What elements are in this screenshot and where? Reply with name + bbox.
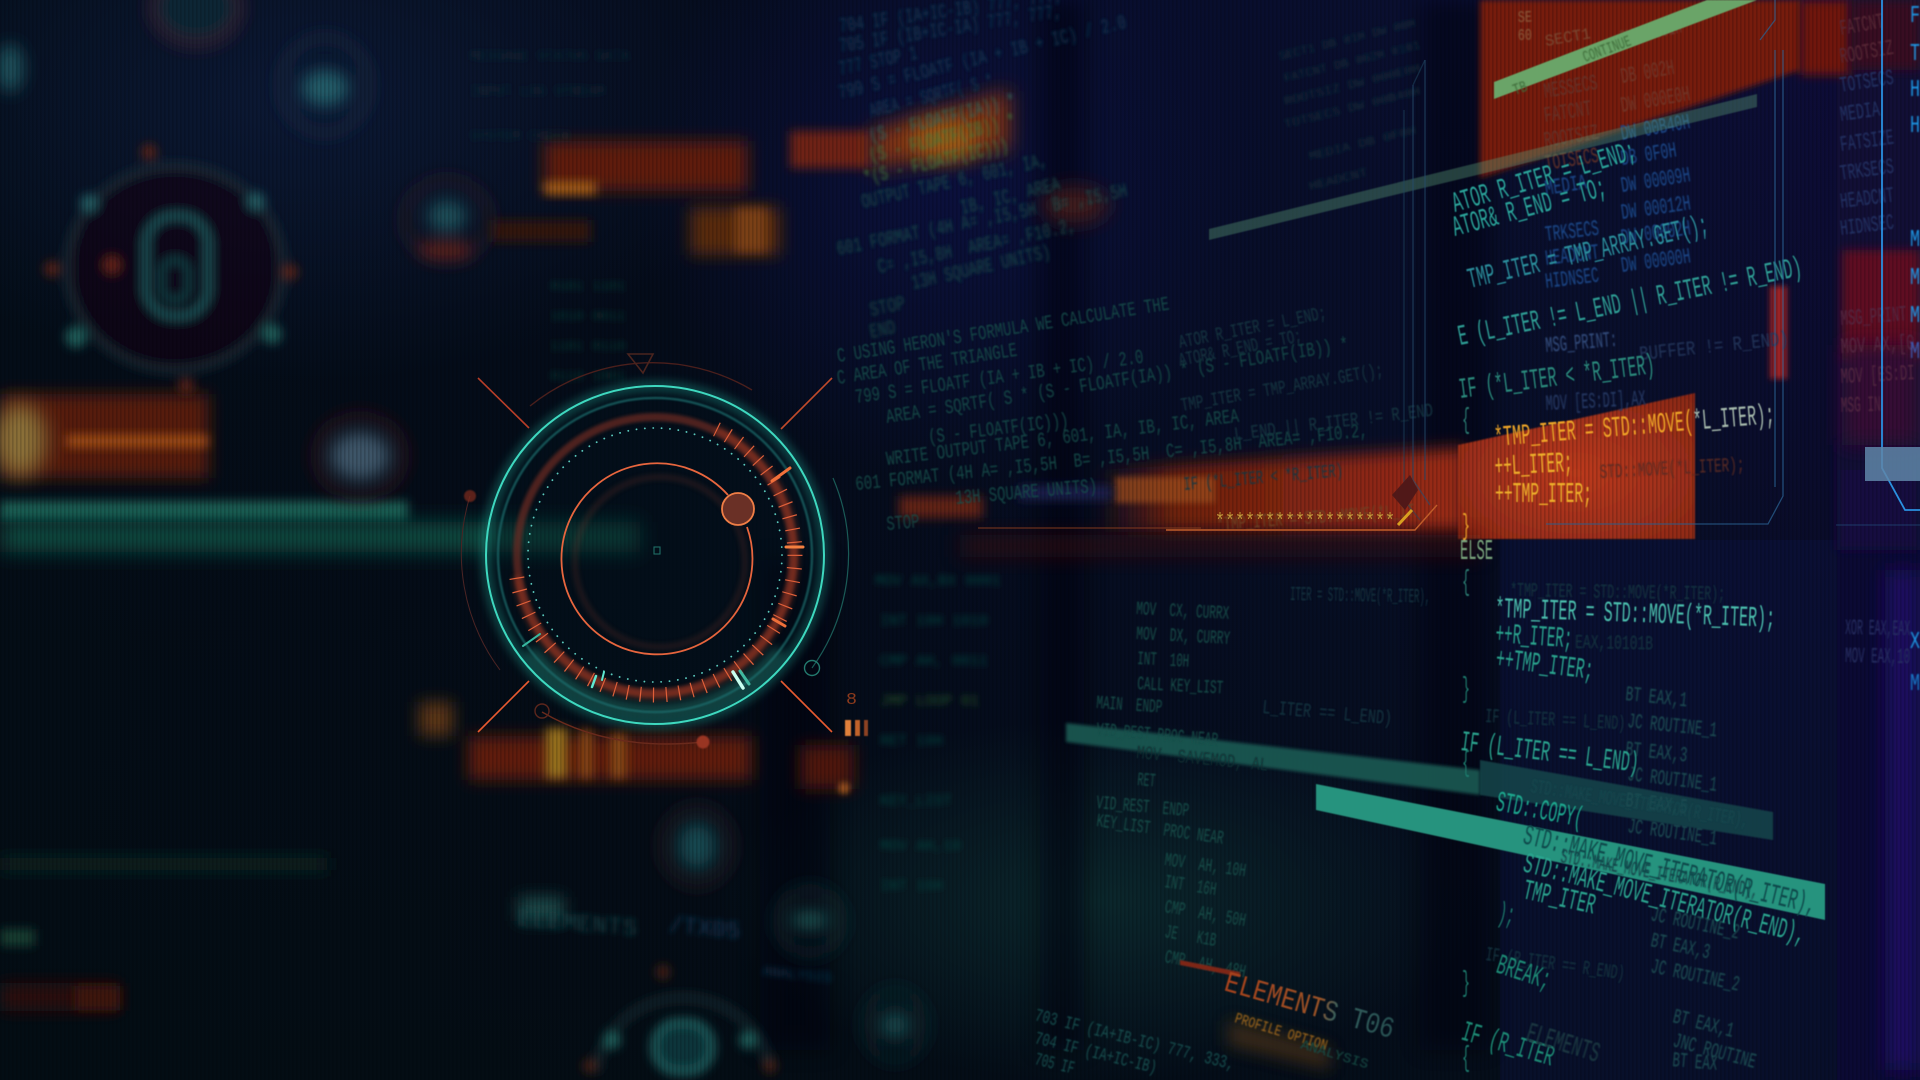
panel: fortran code listing, upper centre: (S - FLOATF(IB)) * bbox=[867, 110, 1018, 169]
panel: main code block, lower: IF (L_ITER == L_END) bbox=[1459, 726, 1641, 781]
panel: blue assembly labels, upper right: DB 002H bbox=[1619, 56, 1676, 90]
panel: blurred code blocks, mid lower left: RET 10H bbox=[880, 733, 943, 750]
panel: fortran code listing, middle: AREA = SQRTF( S * (S - FLOATF(IA)) * (S - FLOATF(IB)) * bbox=[884, 334, 1350, 430]
panel: ghost code, lower right: STD::MAKE_MOVE_ITERATOR(R_ITER), bbox=[1529, 776, 1750, 833]
panel: assembly listing, lower middle: CMP AH, 50H bbox=[1163, 896, 1248, 932]
frame: main code panel bracket bbox=[1546, 0, 1920, 525]
panel: fortran code listing, middle: 13H SQUARE UNITS) bbox=[955, 476, 1098, 511]
panel: assembly listing, lower middle: MOV AH, 10H bbox=[1163, 849, 1247, 882]
panel: fortran code listing, middle: (S - FLOATF(IC))) bbox=[927, 410, 1070, 450]
dial readout: 8 bbox=[846, 691, 857, 710]
text: blurred elements heading, lower centre bbox=[516, 906, 833, 987]
panel: fortran code listing, middle: C USING HERON'S FORMULA WE CALCULATE THE bbox=[835, 294, 1171, 369]
panel: matrix code, upper right of centre: HEADCNT bbox=[1308, 166, 1369, 194]
panel: main code block, highlighted bbox=[1460, 399, 1776, 568]
panel: blue assembly labels, upper right: MESSECS bbox=[1542, 71, 1599, 105]
panel: blurred code blocks, mid lower left: KEY_LIST bbox=[880, 793, 952, 810]
panel: lower right assembly listing: JC ROUTINE_1 bbox=[1626, 764, 1718, 798]
panel: assembly listing, lower middle: INT 16H bbox=[1163, 871, 1218, 901]
panel: main code block, highlighted: } bbox=[1462, 510, 1470, 543]
panel: assembly listing, lower middle: MAIN ENDP bbox=[1096, 692, 1163, 719]
text: blurred elements heading, lower centre: /TX05 bbox=[667, 913, 741, 946]
panel: blurred dim text, top left: SYSTEM CHECK bbox=[470, 129, 571, 145]
dial accent ticks bbox=[523, 468, 803, 688]
panel: fortran code listing, upper centre: (S - FLOATF(IA)) * bbox=[867, 90, 1018, 149]
panel: small text on green band: TB bbox=[1511, 78, 1530, 100]
panel: small text on green band: CONTINUE bbox=[1581, 33, 1634, 67]
panel: left teal band bbox=[0, 501, 640, 1011]
panel: assembly listing, lower middle: INT 10H bbox=[1137, 648, 1190, 673]
panel: fortran code listing, upper centre: 13H SQUARE UNITS) bbox=[909, 241, 1053, 296]
panel: lower right assembly listing: BT EAX,1 bbox=[1624, 684, 1688, 713]
panel: assembly listing, lower middle: RET bbox=[1136, 769, 1156, 793]
dial inner dark disc bbox=[487, 387, 823, 723]
panel: fortran code listing, middle: 601 FORMAT (4H A= ,I5,5H B= ,I5,5H C= ,I5,8H AREA= ,F10.2, bbox=[854, 420, 1369, 497]
panel: main code block, lower: { bbox=[1462, 747, 1470, 780]
panel: ghost code, upper middle: ATOR& R_END = TO; bbox=[1177, 325, 1304, 372]
panel: main code block, highlighted: ++TMP_ITER; bbox=[1495, 478, 1592, 511]
dial thick red ring bbox=[517, 417, 793, 693]
panel: top red glow blocks bbox=[1480, 0, 1920, 445]
panel: matrix code, upper right of centre: SECT1 DB 01H DW 00H bbox=[1278, 16, 1417, 64]
text: blurred elements heading, lower centre: ANALYSIS bbox=[761, 964, 833, 987]
panel: blurred dim text, top left: 1010 0011 bbox=[550, 309, 626, 325]
panel: assembly listing, lower middle bbox=[1095, 598, 1269, 984]
panel: blue assembly labels, upper right: DW 00002H bbox=[1619, 216, 1692, 251]
panel: main code block, highlighted: ++L_ITER; bbox=[1494, 447, 1573, 484]
panel: matrix code, upper right of centre: TOTSECS DW 00B40H bbox=[1283, 84, 1422, 132]
icon: large blurred lock ring bbox=[44, 144, 298, 394]
dial centre marker bbox=[654, 547, 660, 554]
panel: fortran code listing, upper centre: 777 STOP 1 bbox=[837, 43, 920, 82]
heading: elements T06: ELEMENTS T06 bbox=[1220, 967, 1398, 1048]
panel: lower right assembly listing: BT EAX,1 bbox=[1670, 1006, 1736, 1044]
panel: assembly listing, lower middle: MOV CX, CURRX bbox=[1136, 598, 1230, 625]
panel: main code block, lower: { bbox=[1462, 566, 1470, 599]
panel: small text on green band: SE bbox=[1518, 9, 1532, 27]
panel: assembly listing, lower middle: VID_REST ENDP bbox=[1095, 792, 1190, 822]
panel: blue assembly labels, upper right: HIDNSEC bbox=[1544, 264, 1600, 295]
panel: main code block, lower: STD::COPY( bbox=[1493, 786, 1586, 836]
dial tick glow bbox=[517, 429, 795, 695]
panel: main code block, lower: { bbox=[1462, 1042, 1470, 1075]
panel: far right column labels: MSG IN bbox=[1840, 393, 1881, 419]
panel: main code block, highlighted: *TMP_ITER = STD::MOVE(*L_ITER); bbox=[1493, 399, 1776, 455]
panel: matrix code, upper right of centre bbox=[1278, 16, 1422, 194]
panel: fortran code listing, middle: WRITE OUTPUT TAPE 6, 601, IA, IB, IC, AREA bbox=[885, 406, 1240, 472]
text: blurred elements heading, lower centre: ELEMENTS bbox=[516, 906, 638, 943]
panel: fortran code listing, middle bbox=[835, 294, 1369, 537]
heading: elements T06: PROFILE OPTION bbox=[1233, 1011, 1329, 1055]
panel: ghost code, lower right: *TMP_ITER = STD::MOVE(*R_ITER); bbox=[1510, 580, 1725, 607]
panel: ghost code, upper middle: TMP_ITER = TMP_ARRAY.GET(); bbox=[1179, 360, 1385, 417]
panel: assembly listing, lower middle: VID_REST PROC NEAR bbox=[1095, 719, 1219, 752]
panel: blurred code blocks, mid lower left: CMP AH, 0011 bbox=[880, 653, 988, 670]
dial inner orange circle bbox=[561, 463, 752, 654]
panel: ghost code, lower right: STD::MAKE_MOVE_ITERATOR(R_END), bbox=[1559, 846, 1760, 904]
panel: main code block, upper: ATOR& R_END = TO; bbox=[1449, 172, 1610, 245]
panel: blue assembly labels, upper right: TOTSECS bbox=[1543, 144, 1600, 177]
panel: lower right assembly listing: JC ROUTINE_1 bbox=[1626, 711, 1718, 743]
panel: blue assembly labels, upper right bbox=[1542, 15, 1692, 417]
panel: fortran code listing, upper centre: 601 FORMAT (4H A= ,I5,5H B= ,I5,5H bbox=[835, 180, 1129, 262]
frame: first panel bracket bbox=[978, 60, 1437, 530]
panel: main code block, lower: } bbox=[1462, 673, 1470, 706]
panel: blue assembly labels, upper right: DW 00000H bbox=[1619, 244, 1692, 279]
panel: blurred dim text, top left: 1101 0110 bbox=[550, 339, 626, 355]
icon: lower blurred lock bbox=[583, 965, 777, 1073]
panel: main code block, lower: } bbox=[1462, 967, 1470, 1000]
panel: ghost code, lower right: L_ITER == L_END) bbox=[1261, 697, 1393, 731]
panel: blue assembly labels, upper right: MEDIA bbox=[1543, 171, 1589, 202]
panel: highlight bar, bright teal bbox=[1316, 784, 1825, 920]
heading: elements T06: ANALYSIS bbox=[1299, 1037, 1370, 1073]
panel: main code block, upper bbox=[1448, 135, 1805, 437]
panel: lower right assembly listing: JC ROUTINE_2 bbox=[1649, 956, 1741, 998]
panel: fortran code listing, middle: 799 S = FLOATF (IA + IB + IC) / 2.0 bbox=[854, 347, 1145, 410]
panel: blue assembly labels, upper right: TRKSECS bbox=[1544, 217, 1600, 248]
panel: lower right assembly listing: BT EAX,5 bbox=[1624, 790, 1688, 821]
dial dotted ring bbox=[528, 428, 782, 682]
panel: fortran code listing, upper centre: STOP bbox=[868, 293, 908, 323]
panel: blue assembly labels, upper right: ROOTSIZ bbox=[1542, 121, 1600, 154]
panel: main code block, upper: IF (*L_ITER < *R_ITER) bbox=[1457, 349, 1657, 407]
frame: far right bright bracket bbox=[1865, 0, 1920, 510]
panel: ghost code, lower right bbox=[1261, 328, 1790, 986]
panel: highlight bar, dim green bbox=[1209, 94, 1757, 240]
panel: main code block, lower: ++TMP_ITER; bbox=[1494, 643, 1595, 688]
panel: blurred code blocks, mid lower left: MOV AX,BX 0001 bbox=[875, 573, 1001, 590]
panel: main code block, upper: TMP_ITER = TMP_ARRAY.GET(); bbox=[1465, 209, 1712, 297]
panel: far right column labels: FATCNT bbox=[1838, 10, 1886, 42]
panel: main code block, upper: { bbox=[1462, 404, 1470, 437]
panel: blue assembly labels, upper right: DW 000E0H bbox=[1619, 82, 1692, 119]
icon: lower blurred rings bbox=[518, 808, 925, 1059]
panel: ghost code, lower right: EAX,10101B bbox=[1575, 632, 1653, 656]
panel: highlight bar, green top bbox=[1494, 0, 1757, 99]
panel: main code block, lower: ); bbox=[1495, 898, 1518, 933]
panel: blue assembly labels, upper right: MOV [ES:DI],AX bbox=[1545, 387, 1646, 417]
dial corner lines bbox=[478, 378, 832, 732]
panel: blue assembly labels, upper right: DW 00009H bbox=[1619, 163, 1692, 199]
panel: large red highlight block bbox=[899, 286, 1787, 557]
panel: assembly listing, lower middle: CMP AH, 48H bbox=[1163, 946, 1248, 984]
panel: small text on green band: SECT1 bbox=[1544, 25, 1592, 51]
panel: main code block, lower bbox=[1457, 566, 1819, 1075]
panel: blurred code blocks, mid lower left: INT 16H bbox=[880, 878, 943, 895]
panel: blurred code blocks, mid lower left: INT 10H 1010 bbox=[880, 613, 988, 630]
panel: blurred dim text, top left: 0110 1001 bbox=[550, 369, 626, 385]
panel: fortran code listing, upper centre: C= ,I5,8H AREA= ,F10.2, bbox=[876, 215, 1078, 280]
panel: matrix code, upper right of centre: MEDIA DB 0F0H bbox=[1308, 124, 1418, 164]
dial lower ring glow bbox=[530, 650, 780, 711]
panel: fortran code listing, middle: C AREA OF THE TRIANGLE bbox=[835, 340, 1019, 391]
panel: fortran code listing, upper centre: END bbox=[868, 317, 898, 345]
panel: blurred code blocks, mid lower left: JMP LOOP 01 bbox=[880, 693, 979, 710]
HUD dial bbox=[461, 354, 868, 748]
panel: blue assembly labels, upper right: DW 00012H bbox=[1619, 191, 1692, 226]
panel: lower right assembly listing bbox=[1624, 684, 1758, 1077]
panel: blue assembly labels, upper right: FATCNT bbox=[1542, 97, 1594, 129]
dial knob bbox=[722, 493, 754, 525]
panel: upper centre red blocks bbox=[491, 90, 1109, 255]
panel: ghost code, upper middle: ATOR R_ITER = L_END; bbox=[1177, 302, 1328, 354]
panel: far right column labels bbox=[1838, 3, 1920, 698]
panel: blue assembly labels, upper right: HEADCNT bbox=[1544, 241, 1600, 272]
icon: blurred top rings bbox=[0, 0, 489, 496]
dial ticks bbox=[517, 429, 795, 695]
panel: small text on green band: 60 bbox=[1518, 27, 1532, 45]
panel: fortran code listing, upper centre: AREA = SQRTF( S * bbox=[867, 71, 996, 124]
panel: lower right assembly listing: JC ROUTINE_2 bbox=[1649, 904, 1741, 946]
panel: far right column labels: MEDIA bbox=[1838, 98, 1882, 128]
panel: ghost code, lower right: IF (R_ITER == R_END) bbox=[1484, 944, 1626, 986]
chart bar: faint teal highlight strip bbox=[1066, 723, 1773, 840]
dial outer glow bbox=[486, 386, 824, 724]
dial readout bbox=[845, 691, 868, 736]
panel: main code block, highlighted: ELSE bbox=[1460, 535, 1493, 568]
panel: fortran code listing, middle: STOP bbox=[886, 511, 920, 537]
panel: lower right assembly listing: BT EAX bbox=[1671, 1050, 1718, 1077]
panel: ghost code, lower right: ITER = STD::MOVE(*R_ITER), bbox=[1290, 584, 1430, 609]
panel: matrix code, upper right of centre: ROOTSIZ DW 000E0H bbox=[1283, 61, 1422, 109]
panel: ghost code, upper middle bbox=[1177, 302, 1434, 536]
panel: ghost code, upper middle: *TMP_ITER = STD::MOVE(*L_IT bbox=[1216, 500, 1415, 536]
dial outer ring bbox=[486, 386, 824, 724]
panel: blurred dim text, top left: 0101 1101 bbox=[550, 279, 626, 295]
panel: blurred code blocks, mid lower left: MOV AH,10 bbox=[880, 838, 961, 855]
panel: lower right assembly listing: BT EAX,3 bbox=[1624, 739, 1688, 768]
panel: ghost code, lower right: BUFFER != R_END) bbox=[1638, 328, 1790, 367]
panel: assembly listing, lower middle: MOV SAVEMOD, AL bbox=[1135, 742, 1269, 777]
panel: lower centre orange block bbox=[419, 702, 854, 794]
panel: left orange block bbox=[0, 394, 209, 478]
frame: gold star row: ****************** bbox=[1215, 511, 1395, 534]
panel: blue assembly labels, upper right: DW 00001H bbox=[1618, 15, 1684, 52]
panel: ghost code, lower right: STD::MOVE(*L_ITER); bbox=[1599, 454, 1745, 485]
panel: assembly listing, lower middle: CALL KEY_LIST bbox=[1137, 673, 1224, 699]
panel: matrix code, upper right of centre: FATCNT DB 002H 0101 bbox=[1283, 38, 1422, 86]
panel: blurred dim text, top left bbox=[470, 49, 630, 385]
panel: main code block, upper: ATOR R_ITER = L_END; bbox=[1448, 135, 1640, 221]
panel: fortran code listing, upper centre: IB, IC, AREA bbox=[958, 174, 1063, 221]
panel: blue assembly labels, upper right: MSG_PRINT: bbox=[1544, 328, 1618, 359]
dial outer arcs bbox=[461, 354, 849, 744]
panel: small text on green band bbox=[1511, 9, 1634, 100]
panel: main code block, lower: TMP_ITER bbox=[1520, 875, 1598, 922]
panel: main code block, lower: BREAK; bbox=[1492, 949, 1555, 998]
panel: ghost code, lower right: IF (L_ITER == L_END) bbox=[1485, 706, 1626, 736]
heading: elements T06 bbox=[1180, 960, 1398, 1073]
panel: lower right assembly listing: JC ROUTINE_1 bbox=[1626, 816, 1718, 851]
panel: blurred code blocks, mid lower left bbox=[875, 573, 1001, 895]
panel: blurred dim text, top left: INPUT LOG STREAM bbox=[470, 84, 604, 100]
panel: main code block, lower: ++R_ITER; bbox=[1494, 618, 1573, 656]
panel: lower right assembly listing: BT EAX,3 bbox=[1649, 930, 1712, 965]
panel: blue assembly labels, upper right: DW 00B40H bbox=[1619, 110, 1692, 147]
panel: assembly listing, lower middle: MOV DX, CURRY bbox=[1136, 623, 1231, 650]
panel: blurred dim text, top left: MESSAGE STATUS DATA bbox=[470, 49, 630, 65]
panel: ghost code, upper middle: L_END || R_ITER != R_END bbox=[1233, 400, 1434, 446]
dial node dots bbox=[464, 490, 710, 748]
panel: fortran code listing, upper centre bbox=[835, 0, 1129, 345]
panel: ghost code, upper middle: IF (*L_ITER < *R_ITER) bbox=[1183, 460, 1344, 496]
panel: fortran code listing, upper centre: *(S - FLOATF(IC))) bbox=[861, 135, 1011, 191]
dial second cyan ring bbox=[498, 398, 812, 712]
panel: blue assembly labels, upper right: DB 0F0H bbox=[1619, 138, 1678, 172]
panel: assembly listing, lower middle: KEY_LIST PROC NEAR bbox=[1095, 810, 1225, 850]
panel: fortran code listing, upper centre: OUTPUT TAPE 6, 601, IA, bbox=[859, 150, 1050, 215]
panel: assembly listing, lower middle: JE K1B bbox=[1163, 921, 1218, 952]
